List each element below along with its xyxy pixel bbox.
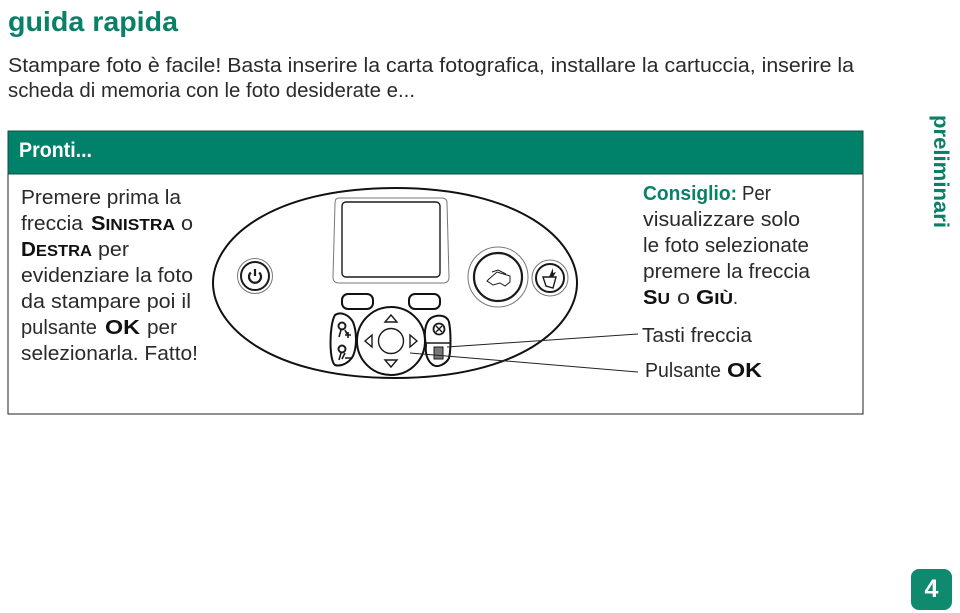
instructions text: o — [181, 213, 193, 235]
label: OK button: OK — [727, 360, 763, 382]
instructions text: per — [98, 239, 129, 261]
instructions text: da stampare poi il — [21, 291, 191, 313]
intro text: scheda di memoria con le foto desiderate e... — [8, 80, 415, 102]
tip text: . — [733, 287, 738, 309]
panel header bar — [8, 131, 863, 174]
page number badge: 4 — [925, 575, 939, 603]
panel frame — [8, 131, 863, 414]
display screen — [333, 198, 449, 283]
tip text: Per — [742, 183, 771, 205]
control panel diagram — [213, 188, 577, 378]
instructions text: evidenziare la foto — [21, 265, 193, 287]
icon: power button — [238, 258, 272, 294]
instructions text: selezionarla. Fatto! — [21, 343, 198, 365]
instructions text: Premere prima la — [21, 187, 182, 209]
instructions text — [21, 187, 198, 365]
label: OK button: Pulsante — [645, 360, 721, 382]
tip text: premere la freccia — [643, 261, 811, 283]
tip text: visualizzare solo — [643, 209, 800, 231]
instructions text: DESTRA — [21, 239, 92, 261]
instructions text: SINISTRA — [91, 213, 175, 235]
arrow pad — [357, 307, 425, 375]
soft buttons — [342, 294, 440, 309]
leader lines — [410, 334, 638, 372]
page number badge — [911, 569, 952, 610]
intro text — [8, 55, 855, 102]
tip text: Consiglio: — [643, 183, 737, 205]
side label: preliminari — [929, 115, 952, 228]
panel heading: Pronti... — [19, 139, 92, 162]
instructions text: pulsante — [21, 317, 97, 339]
tip text — [643, 183, 811, 309]
tip text: o — [677, 287, 690, 309]
tip text: GIÙ — [696, 287, 733, 309]
tip text: SU — [643, 287, 670, 309]
label: arrow keys: Tasti freccia — [642, 325, 753, 347]
instructions text: OK — [105, 317, 141, 339]
panel: Pronti — [8, 131, 863, 414]
intro text: Stampare foto è facile! Basta inserire la carta fotografica, installare la cartuccia, inserire la — [8, 55, 855, 77]
cancel and OK buttons — [425, 316, 450, 366]
tip text: le foto selezionate — [643, 235, 809, 257]
zoom buttons — [330, 313, 356, 366]
label: OK button — [645, 360, 763, 382]
console outline — [213, 188, 577, 378]
icon: photo button — [532, 260, 568, 296]
instructions text: per — [147, 317, 177, 339]
instructions text: freccia — [21, 213, 84, 235]
icon: print button — [468, 247, 528, 307]
title: guida rapida — [8, 6, 178, 37]
